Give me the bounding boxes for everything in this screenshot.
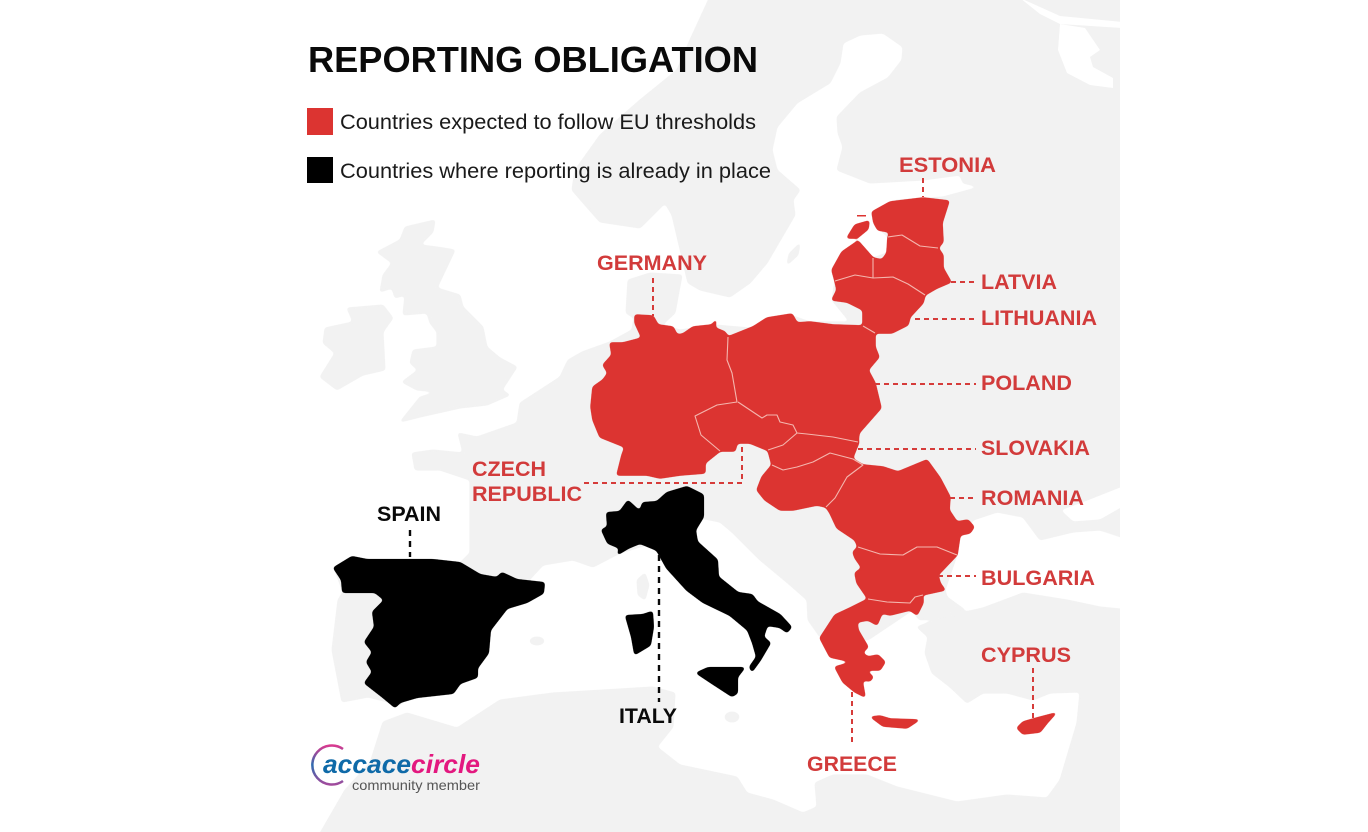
label: Czech Republic: REPUBLIC <box>472 483 582 506</box>
country: Lithuania <box>832 275 925 333</box>
label: Bulgaria: BULGARIA <box>981 567 1095 590</box>
legend swatch: red <box>307 108 333 135</box>
label: Czech Republic <box>472 458 582 506</box>
landmass: Great Britain <box>377 220 517 422</box>
label: Latvia: LATVIA <box>981 271 1057 294</box>
country: Estonia <box>847 198 949 248</box>
landmass: Malta <box>725 712 739 722</box>
logo tagline: community member <box>352 777 480 793</box>
country: Czech Republic <box>695 402 797 451</box>
country: Bulgaria <box>853 547 957 603</box>
landmass: Gotland <box>788 244 800 264</box>
country: Cyprus <box>1017 713 1056 734</box>
landmass: Ireland <box>320 305 393 390</box>
legend text: red: Countries expected to follow EU thresholds <box>340 111 756 134</box>
label: Cyprus: CYPRUS <box>981 644 1071 667</box>
country: Hungary <box>757 453 863 510</box>
landmass: Turkey, Levant and North Africa <box>315 593 1130 832</box>
country borders <box>695 235 957 603</box>
island: Saaremaa <box>847 221 869 238</box>
island: Sardinia <box>626 612 653 654</box>
title: REPORTING OBLIGATION <box>308 39 758 80</box>
island: Crete <box>871 716 919 728</box>
map: red countries <box>591 198 1056 734</box>
label: Germany: GERMANY <box>597 252 707 275</box>
label: Romania: ROMANIA <box>981 487 1084 510</box>
legend text: black: Countries where reporting is already in place <box>340 160 771 183</box>
country: Poland <box>727 314 881 442</box>
island: Hiiumaa <box>857 215 866 216</box>
label: Slovakia: SLOVAKIA <box>981 437 1090 460</box>
leader lines <box>410 178 1033 742</box>
label: Estonia: ESTONIA <box>899 154 996 177</box>
logo ring <box>312 746 343 784</box>
country: Slovakia <box>768 433 859 470</box>
background map: grey landmasses <box>315 0 1130 832</box>
island: Sicily <box>697 668 744 696</box>
landmass: mainland Europe and Scandinavia <box>332 0 1130 705</box>
label: Greece: GREECE <box>807 753 897 776</box>
label: Czech Republic: CZECH <box>472 458 546 481</box>
country: Germany <box>591 315 737 478</box>
landmass: Corsica <box>637 573 649 600</box>
logo wordmark: accacecircle <box>323 749 480 779</box>
landmass: Balearic island <box>530 637 544 645</box>
legend <box>307 108 771 183</box>
logo: accace circle community member <box>312 746 480 793</box>
map: black countries <box>334 487 791 707</box>
country: Spain <box>334 557 544 707</box>
country: Romania <box>826 460 974 555</box>
label: Spain: SPAIN <box>377 503 441 526</box>
label: Lithuania: LITHUANIA <box>981 307 1097 330</box>
sea: Barents coast strip <box>1020 0 1122 28</box>
country: Latvia <box>832 235 951 295</box>
country: Italy <box>602 487 791 696</box>
country: Greece <box>820 597 923 728</box>
legend swatch: black <box>307 157 333 183</box>
label: Poland: POLAND <box>981 372 1072 395</box>
label: Italy: ITALY <box>619 705 677 728</box>
sea: White Sea <box>1058 24 1113 88</box>
